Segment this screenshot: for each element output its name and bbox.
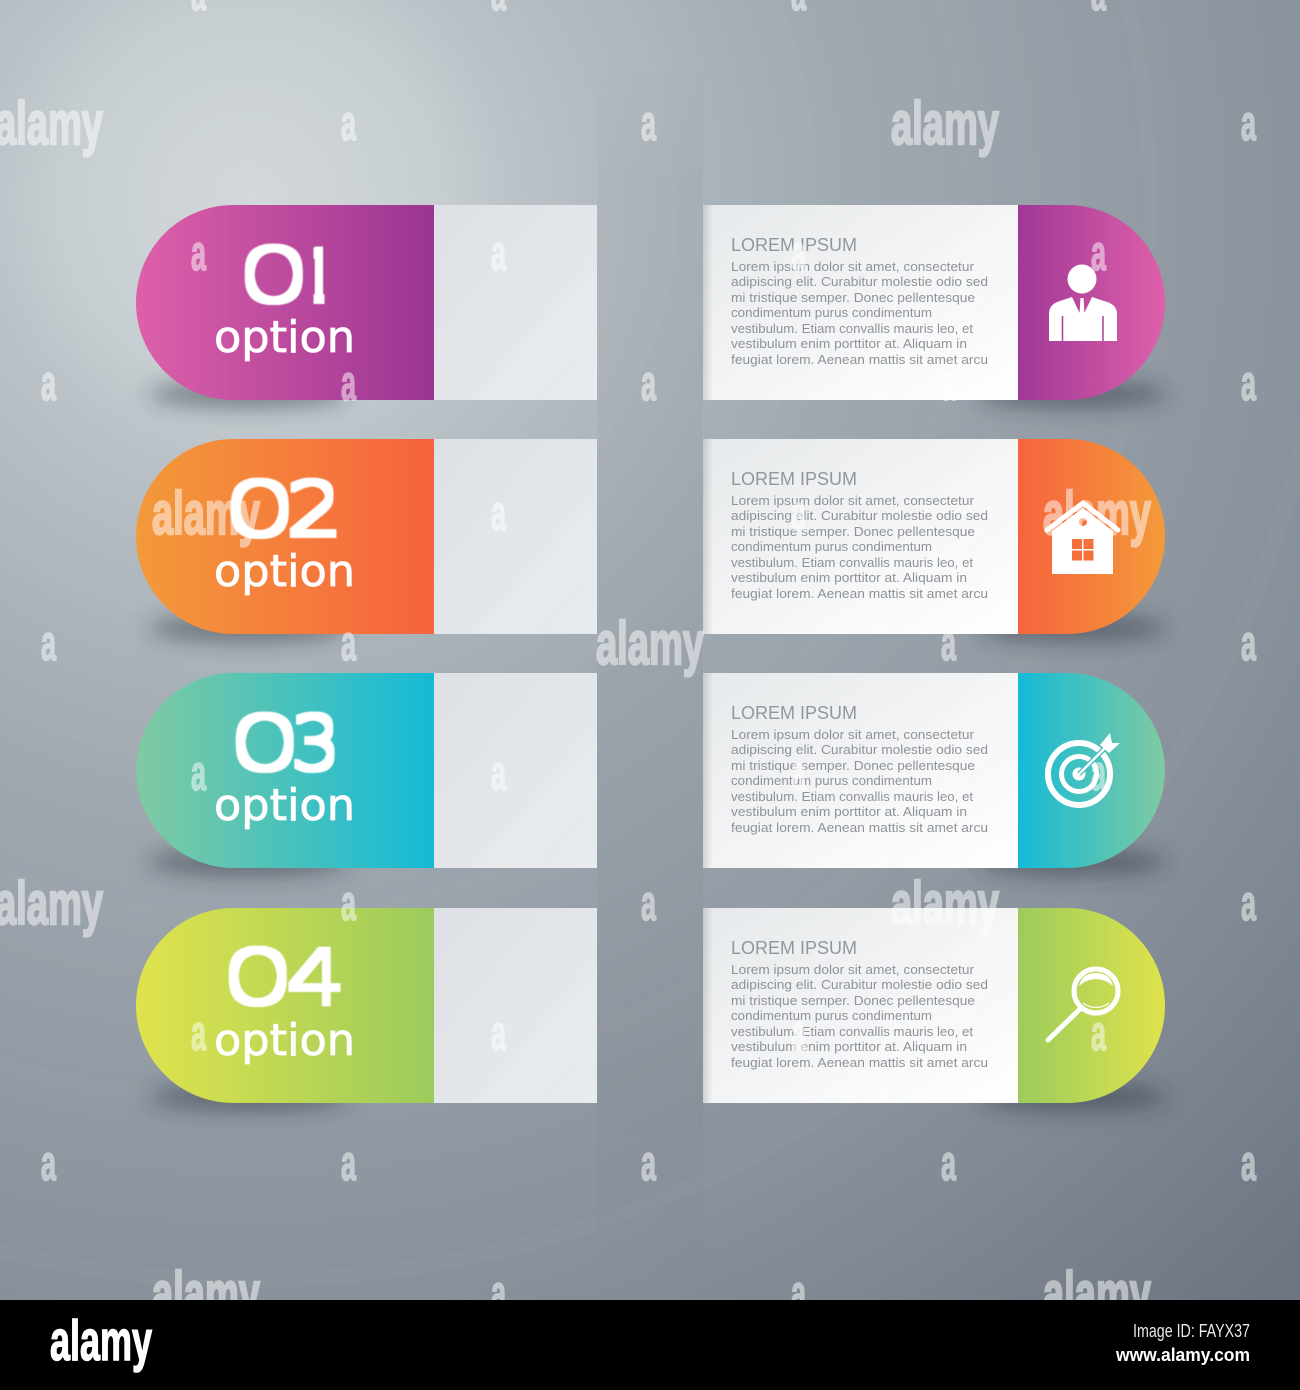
alamy watermarks: a bbox=[341, 875, 357, 931]
left blank panel 4 bbox=[434, 908, 597, 1103]
alamy watermarks: a bbox=[1241, 1135, 1257, 1191]
alamy watermarks: a bbox=[491, 1265, 507, 1321]
option label 3: option bbox=[214, 780, 355, 831]
number 03: 3 bbox=[290, 702, 341, 787]
left coloured pill 1 bbox=[136, 205, 434, 400]
icon: businessman bbox=[1049, 264, 1117, 341]
text heading 2: LOREM IPSUM bbox=[731, 469, 857, 489]
alamy watermarks: a bbox=[641, 1135, 657, 1191]
left coloured pill 3 bbox=[136, 673, 434, 868]
icon: house bbox=[1047, 503, 1118, 574]
body text 1: mi tristique semper. Donec pellentesque bbox=[731, 290, 975, 305]
alamy watermarks: alamy bbox=[891, 90, 999, 157]
body text 3: vestibulum enim porttitor at. Aliquam in bbox=[731, 804, 967, 819]
alamy watermarks: alamy bbox=[1043, 1260, 1151, 1327]
alamy watermarks: a bbox=[491, 485, 507, 541]
body text 3: condimentum purus condimentum bbox=[731, 773, 932, 788]
body text 2: vestibulum. Etiam convallis mauris leo, et bbox=[731, 555, 973, 570]
right text panel 1 bbox=[703, 205, 1018, 400]
right coloured pill 2 bbox=[1018, 439, 1165, 634]
row 2: option 02 bbox=[136, 439, 1167, 642]
body text 1: vestibulum. Etiam convallis mauris leo, et bbox=[731, 321, 973, 336]
body text 1: adipiscing elit. Curabitur molestie odio sed bbox=[731, 274, 988, 289]
right coloured pill 3 bbox=[1018, 673, 1165, 868]
alamy watermarks: a bbox=[641, 355, 657, 411]
body text 4: mi tristique semper. Donec pellentesque bbox=[731, 993, 975, 1008]
body text 2: Lorem ipsum dolor sit amet, consectetur bbox=[731, 493, 975, 508]
body text 3 bbox=[731, 727, 988, 835]
option label 1: option bbox=[214, 312, 355, 363]
body text 3: vestibulum. Etiam convallis mauris leo, et bbox=[731, 789, 973, 804]
option label 4: option bbox=[214, 1015, 355, 1066]
alamy watermarks: a bbox=[791, 485, 807, 541]
number 02: 0 bbox=[222, 468, 298, 553]
body text 2: adipiscing elit. Curabitur molestie odio sed bbox=[731, 508, 988, 523]
number 01: 0 bbox=[236, 234, 312, 319]
body text 3: Lorem ipsum dolor sit amet, consectetur bbox=[731, 727, 975, 742]
alamy watermarks: a bbox=[1091, 745, 1107, 801]
alamy watermarks: a bbox=[941, 1135, 957, 1191]
right shadow 1 bbox=[977, 380, 1167, 408]
body text 3: mi tristique semper. Donec pellentesque bbox=[731, 758, 975, 773]
website: www.alamy.com bbox=[1115, 1345, 1250, 1365]
body text 4: vestibulum enim porttitor at. Aliquam in bbox=[731, 1039, 967, 1054]
number 04: 4 bbox=[286, 935, 346, 1020]
right text panel 4 bbox=[703, 908, 1018, 1103]
alamy watermarks: a bbox=[41, 1135, 57, 1191]
alamy watermarks: a bbox=[341, 355, 357, 411]
left shadow 4 bbox=[148, 1083, 348, 1111]
body text 4: vestibulum. Etiam convallis mauris leo, et bbox=[731, 1024, 973, 1039]
alamy watermarks: a bbox=[941, 355, 957, 411]
alamy watermarks: a bbox=[791, 225, 807, 281]
body text 1: Lorem ipsum dolor sit amet, consectetur bbox=[731, 259, 975, 274]
body text 4: feugiat lorem. Aenean mattis sit amet arcu bbox=[731, 1055, 988, 1070]
right coloured pill 1 bbox=[1018, 205, 1165, 400]
text heading 4: LOREM IPSUM bbox=[731, 938, 857, 958]
alamy watermarks: alamy bbox=[152, 1260, 260, 1327]
right shadow 2 bbox=[977, 614, 1167, 642]
alamy watermarks: a bbox=[41, 615, 57, 671]
alamy watermarks: a bbox=[491, 745, 507, 801]
image id: Image ID: FAYX37 bbox=[1133, 1321, 1250, 1341]
body text 4 bbox=[731, 962, 988, 1070]
alamy watermarks: a bbox=[1241, 355, 1257, 411]
row 1: option 01 bbox=[136, 205, 1167, 408]
number 01: 1 bbox=[298, 217, 337, 323]
right shadow 4 bbox=[977, 1083, 1167, 1111]
alamy watermarks: alamy bbox=[0, 870, 103, 937]
alamy watermarks: a bbox=[191, 225, 207, 281]
alamy watermarks: a bbox=[641, 875, 657, 931]
alamy watermarks: alamy bbox=[891, 870, 999, 937]
text heading 1: LOREM IPSUM bbox=[731, 235, 857, 255]
body text 3: feugiat lorem. Aenean mattis sit amet arcu bbox=[731, 820, 988, 835]
alamy watermarks: a bbox=[791, 1265, 807, 1321]
row 3: option 03 bbox=[136, 673, 1167, 876]
body text 3: adipiscing elit. Curabitur molestie odio sed bbox=[731, 742, 988, 757]
body text 2: vestibulum enim porttitor at. Aliquam in bbox=[731, 570, 967, 585]
alamy watermarks: a bbox=[941, 615, 957, 671]
body text 1: feugiat lorem. Aenean mattis sit amet arcu bbox=[731, 352, 988, 367]
body text 2 bbox=[731, 493, 988, 601]
right shadow 3 bbox=[977, 848, 1167, 876]
alamy watermarks: a bbox=[1091, 225, 1107, 281]
icon: magnifying glass bbox=[1048, 969, 1118, 1040]
left shadow 2 bbox=[148, 614, 348, 642]
alamy watermarks: a bbox=[41, 355, 57, 411]
alamy watermarks: a bbox=[491, 1005, 507, 1061]
alamy watermarks: alamy bbox=[1043, 480, 1151, 547]
alamy watermarks: a bbox=[491, 225, 507, 281]
left coloured pill 2 bbox=[136, 439, 434, 634]
footer logo: alamy bbox=[50, 1309, 152, 1373]
alamy watermarks: alamy bbox=[596, 610, 704, 677]
alamy watermarks: a bbox=[341, 95, 357, 151]
number 04: 0 bbox=[220, 936, 296, 1021]
left coloured pill 4 bbox=[136, 908, 434, 1103]
number 03 bbox=[227, 702, 341, 787]
alamy watermarks: a bbox=[791, 745, 807, 801]
body text 1 bbox=[731, 259, 988, 367]
alamy watermarks: a bbox=[341, 1135, 357, 1191]
body text 2: condimentum purus condimentum bbox=[731, 539, 932, 554]
body text 2: mi tristique semper. Donec pellentesque bbox=[731, 524, 975, 539]
left blank panel 3 bbox=[434, 673, 597, 868]
option label 2: option bbox=[214, 546, 355, 597]
number 03: 0 bbox=[227, 702, 303, 787]
body text 4: Lorem ipsum dolor sit amet, consectetur bbox=[731, 962, 975, 977]
number 02: 2 bbox=[285, 468, 344, 553]
left shadow 1 bbox=[148, 380, 348, 408]
alamy watermarks: alamy bbox=[0, 90, 103, 157]
row 4: option 04 bbox=[136, 908, 1167, 1111]
alamy watermarks: a bbox=[191, 1005, 207, 1061]
body text 4: adipiscing elit. Curabitur molestie odio sed bbox=[731, 977, 988, 992]
right text panel 2 bbox=[703, 439, 1018, 634]
body text 2: feugiat lorem. Aenean mattis sit amet arcu bbox=[731, 586, 988, 601]
left blank panel 1 bbox=[434, 205, 597, 400]
footer bar bbox=[0, 1300, 1300, 1390]
left shadow 3 bbox=[148, 848, 348, 876]
body text 1: condimentum purus condimentum bbox=[731, 305, 932, 320]
alamy watermarks: a bbox=[1241, 95, 1257, 151]
left blank panel 2 bbox=[434, 439, 597, 634]
number 04 bbox=[220, 935, 346, 1021]
icon: target with arrow bbox=[1048, 733, 1120, 805]
alamy watermarks: alamy bbox=[152, 480, 260, 547]
alamy watermarks: a bbox=[191, 745, 207, 801]
right coloured pill 4 bbox=[1018, 908, 1165, 1103]
alamy watermarks: a bbox=[791, 1005, 807, 1061]
body text 1: vestibulum enim porttitor at. Aliquam in bbox=[731, 336, 967, 351]
alamy watermarks: a bbox=[1091, 1005, 1107, 1061]
text heading 3: LOREM IPSUM bbox=[731, 703, 857, 723]
alamy watermarks: a bbox=[341, 615, 357, 671]
right text panel 3 bbox=[703, 673, 1018, 868]
alamy watermarks: a bbox=[1241, 875, 1257, 931]
body text 4: condimentum purus condimentum bbox=[731, 1008, 932, 1023]
number 02 bbox=[222, 468, 344, 553]
alamy watermarks: a bbox=[641, 95, 657, 151]
number 01 bbox=[244, 242, 326, 306]
alamy watermarks: a bbox=[1241, 615, 1257, 671]
